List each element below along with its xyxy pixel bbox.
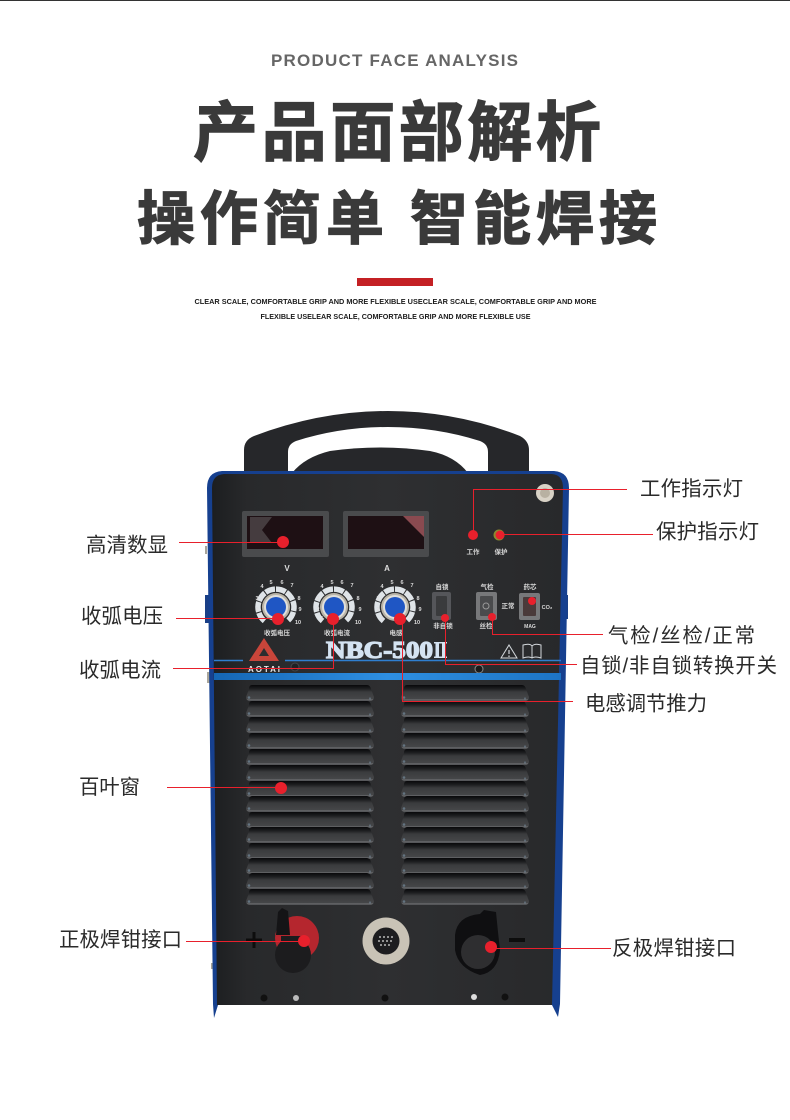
knob: arc current: 2 — [316, 607, 320, 613]
digital display V — [242, 511, 329, 557]
callout labels: 气检/丝检/正常 — [608, 624, 755, 648]
knob: arc current: 5 — [330, 580, 334, 586]
switch: flux core: 药芯 — [524, 582, 537, 591]
knob: arc voltage: 3 — [255, 596, 259, 602]
knob: arc current: 10 — [355, 620, 361, 626]
blue casing — [207, 471, 569, 1018]
digital display A — [343, 511, 429, 557]
welding machine — [205, 411, 569, 1018]
callout labels: 自锁/非自锁转换开关 — [580, 654, 777, 678]
knob: inductance: 2 — [376, 607, 380, 613]
knob: arc current — [316, 580, 362, 637]
logo — [248, 638, 280, 674]
display unit labels — [284, 564, 390, 573]
knob: inductance: 9 — [418, 607, 422, 613]
knob: arc current: 7 — [350, 583, 354, 589]
callout labels: 收弧电流 — [79, 659, 161, 682]
title line 1: 产品面部解析 — [193, 96, 601, 169]
protect lamp bezel — [494, 530, 504, 540]
switch: flux core: CO₂ — [542, 605, 553, 611]
knob: arc voltage: 1 — [260, 616, 264, 622]
knob: inductance: 电感 — [390, 628, 403, 637]
switch: gas check: 气检 — [480, 582, 494, 591]
callout labels: 高清数显 — [86, 534, 168, 557]
knob: arc current: 4 — [320, 584, 324, 590]
callout labels: 电感调节推力 — [585, 692, 707, 716]
callout dots — [272, 530, 536, 953]
knob: inductance: 8 — [416, 596, 420, 602]
side hinges — [205, 595, 210, 623]
side bolts — [205, 546, 560, 970]
switch: gas check — [476, 582, 515, 630]
switch: self lock — [432, 582, 453, 630]
callout labels: 保护指示灯 — [656, 520, 759, 544]
knob: arc voltage: 10 — [295, 620, 301, 626]
indicator labels — [466, 547, 508, 556]
louvers left — [246, 685, 374, 904]
knob: inductance — [376, 580, 422, 637]
english subtitle — [194, 299, 597, 321]
switch: gas check: 丝检 — [480, 621, 493, 630]
callout labels: 工作指示灯 — [640, 478, 743, 500]
blue stripe — [214, 673, 561, 680]
knob: arc voltage: 4 — [260, 584, 264, 590]
black face panel — [212, 474, 563, 1005]
knob: inductance: 3 — [376, 596, 380, 602]
knob: inductance: 4 — [380, 584, 384, 590]
display unit labels: A — [384, 564, 390, 573]
red accent bar — [357, 278, 433, 286]
bottom screws — [260, 994, 508, 1002]
switch: self lock: 自锁 — [436, 582, 449, 591]
switch: flux core: MAG — [524, 624, 536, 630]
switch: flux core — [519, 582, 553, 630]
knob: arc voltage: 8 — [297, 596, 301, 602]
knob: arc current: 收弧电流 — [324, 628, 350, 637]
knob: arc current: 9 — [358, 607, 362, 613]
screws — [291, 663, 299, 671]
louvers right — [401, 685, 529, 904]
callout labels — [59, 478, 777, 960]
carry handle — [244, 411, 529, 475]
knob: arc current: 3 — [316, 596, 320, 602]
knob: arc current: 8 — [356, 596, 360, 602]
thin blue rule — [214, 660, 561, 662]
callout labels: 反极焊钳接口 — [612, 937, 736, 960]
knob: arc voltage: 2 — [255, 607, 259, 613]
display unit labels: V — [284, 564, 290, 573]
indicator labels: 工作 — [466, 547, 480, 556]
negative terminal — [455, 910, 525, 975]
knob: inductance: 6 — [400, 580, 404, 586]
callout labels: 收弧电压 — [81, 605, 163, 628]
english subtitle: CLEAR SCALE, COMFORTABLE GRIP AND MORE FLEXIBLE USECLEAR SCALE, COMFORTABLE GRIP AND MORE — [194, 299, 597, 306]
corner rivet — [536, 484, 554, 502]
knob: inductance: 10 — [414, 620, 420, 626]
indicator labels: 保护 — [494, 547, 508, 556]
knob: inductance: 1 — [380, 616, 384, 622]
model name: NBC-500 — [326, 638, 433, 664]
top edge line — [0, 0, 790, 1]
knob: arc voltage: 9 — [298, 607, 302, 613]
warning icons — [501, 644, 541, 658]
control socket — [362, 918, 410, 964]
knob: arc current: 1 — [320, 616, 324, 622]
knob: arc current: 6 — [340, 580, 344, 586]
knob: arc voltage: 7 — [290, 583, 294, 589]
english subtitle: FLEXIBLE USELEAR SCALE, COMFORTABLE GRIP AND MORE FLEXIBLE USE — [260, 314, 531, 321]
knob: inductance: 5 — [390, 580, 394, 586]
callout labels: 正极焊钳接口 — [59, 928, 182, 952]
title line 2: 操作简单 智能焊接 — [137, 187, 657, 252]
knob: arc voltage — [255, 580, 302, 637]
logo: AOTAI — [248, 665, 280, 674]
switch: gas check: 正常 — [502, 601, 515, 610]
knob: arc voltage: 5 — [269, 580, 273, 586]
switch: self lock: 非自锁 — [433, 621, 453, 630]
knob: inductance: 7 — [410, 583, 414, 589]
knob: arc voltage: 收弧电压 — [264, 628, 290, 637]
knob: arc voltage: 6 — [280, 580, 284, 586]
callout labels: 百叶窗 — [79, 776, 140, 799]
positive terminal — [246, 908, 319, 973]
callout leader lines — [167, 490, 653, 948]
english kicker: PRODUCT FACE ANALYSIS — [271, 51, 518, 70]
